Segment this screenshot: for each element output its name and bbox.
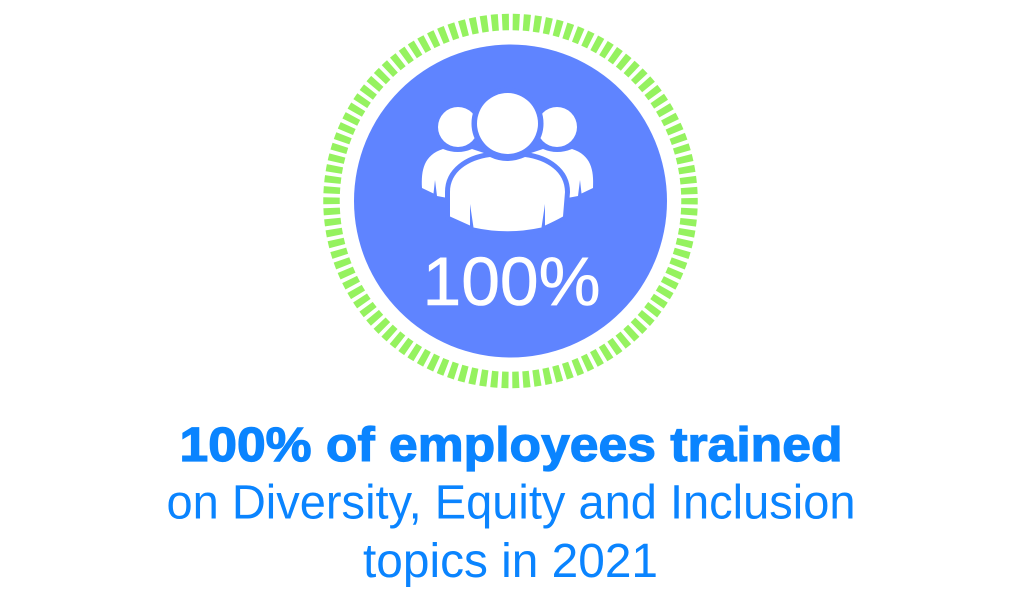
badge figure: 100%: 100% (422, 243, 600, 320)
icon: group of people (422, 93, 593, 231)
dashed green ring (332, 22, 690, 380)
description line 1: on Diversity, Equity and Inclusion (166, 476, 856, 530)
description line 2: topics in 2021 (363, 535, 658, 588)
headline: 100% of employees trained (180, 419, 842, 472)
blue circle badge (354, 44, 667, 358)
